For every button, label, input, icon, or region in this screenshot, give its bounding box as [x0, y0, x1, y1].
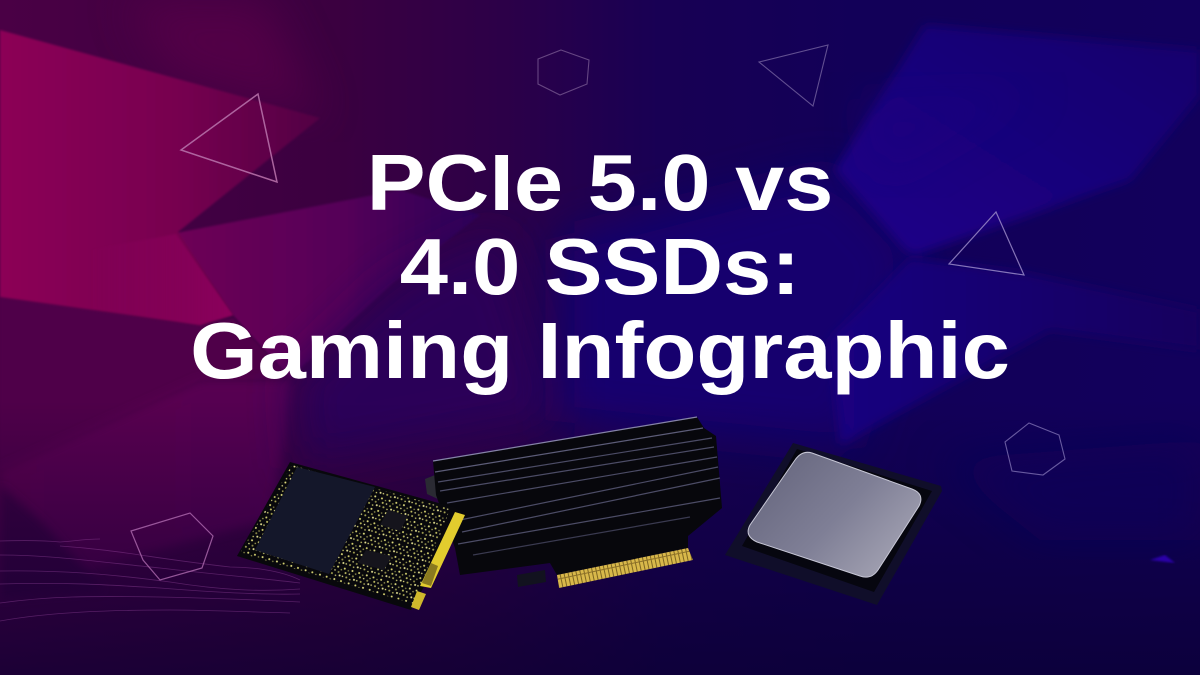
cpu substrate [725, 443, 942, 605]
CPU chip [725, 443, 942, 605]
ssd component dots [240, 465, 450, 604]
ssd dark label [255, 467, 375, 574]
ssd yellow strip [420, 512, 465, 588]
ssd board [237, 462, 465, 610]
M.2 SSD [237, 462, 465, 610]
outline shape: lower left pentagon [131, 513, 213, 580]
wave lines [0, 539, 300, 621]
ssd lower contact [411, 591, 426, 610]
title: PCIe 5.0 vs [367, 138, 833, 227]
black bracket tab [517, 570, 546, 587]
outline shape: top hexagon [538, 50, 589, 95]
outline shape: lower right hexagon [1005, 423, 1065, 475]
outline shape: right triangle [949, 212, 1024, 275]
left mounting tab [425, 475, 440, 500]
gold connector [557, 548, 693, 588]
cpu metal lid [748, 452, 921, 577]
title: 4.0 SSDs: [400, 222, 800, 311]
heatsink card [425, 417, 722, 588]
title [190, 138, 1010, 395]
heatsink body [433, 417, 722, 575]
title: Gaming Infographic [190, 306, 1010, 395]
heatsink fins [433, 417, 720, 555]
cpu inner step [742, 449, 932, 592]
outline shape: top right triangle [759, 45, 828, 106]
ssd barcode [422, 563, 438, 586]
ssd chips [380, 510, 408, 531]
outline shape: left triangle [181, 94, 277, 182]
